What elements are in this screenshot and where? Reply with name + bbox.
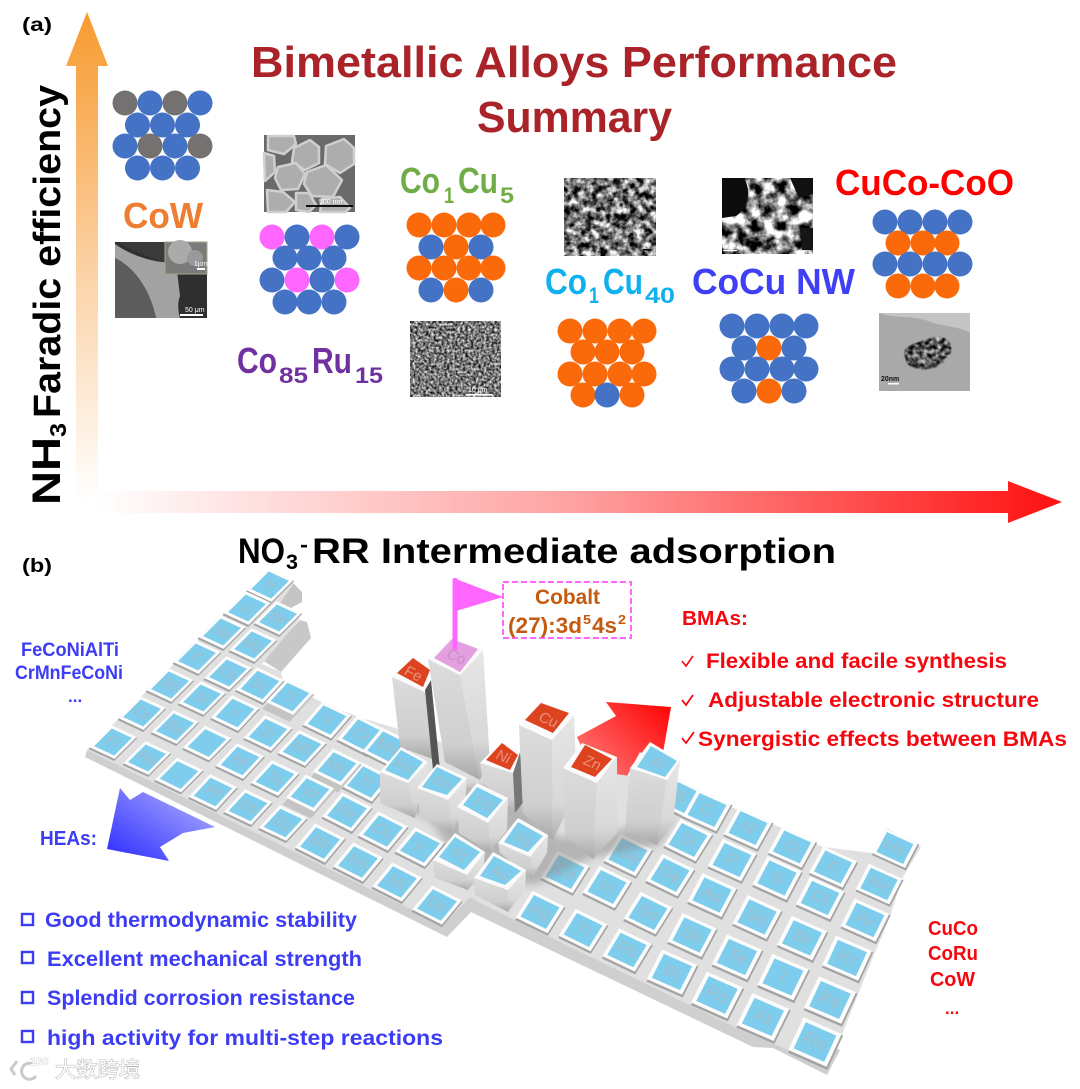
micrograph: Co1Cu5: 10 μm [468, 387, 488, 394]
periodic table tiles: Sc [247, 676, 273, 695]
callout: cobalt electron configuration [503, 582, 631, 638]
periodic table tiles: Hf [228, 752, 253, 771]
periodic table tiles: Ge [655, 863, 685, 887]
periodic table tiles: Ne [865, 873, 893, 895]
micrograph: Co1Cu5 [410, 321, 501, 397]
periodic table tiles: Y [225, 705, 245, 721]
periodic table tiles: S [768, 867, 787, 888]
label: high-entropy alloy examples [15, 640, 123, 706]
text block: BMAs advantages: BMAs: [682, 608, 748, 630]
periodic table tiles: B [671, 787, 690, 807]
periodic table tiles: Re [333, 801, 361, 823]
periodic table tiles: Xe [815, 987, 845, 1012]
periodic table tiles: Nb [288, 738, 316, 758]
callout: cobalt electron configuration: 4s [592, 613, 617, 638]
watermark: 大数跨境 [55, 1059, 140, 1082]
periodic table tiles: Ta [262, 769, 288, 788]
micrograph: CuCo-CoO TEM: 20nm [881, 376, 899, 383]
periodic table tiles: Br [790, 926, 815, 949]
label: bimetallic alloy examples: CuCo [928, 918, 978, 940]
label: Co85Ru15: 85 [279, 363, 308, 388]
arrow: vertical faradic efficiency axis [66, 12, 108, 502]
periodic table tiles: Ti [279, 689, 300, 706]
tower: Au [474, 852, 526, 912]
label: bimetallic alloy examples: CoW [930, 969, 975, 991]
watermark [11, 1056, 140, 1082]
atom lattice: Co85Ru15 [260, 224, 360, 314]
label: CuCo-CoO: CuCo-CoO [835, 162, 1014, 203]
atom lattice: CuCo-CoO [872, 210, 972, 298]
watermark: 100 [30, 1056, 48, 1068]
tower: Cu: Cu [535, 710, 561, 731]
periodic table tiles: Mt [384, 872, 411, 893]
text block: BMAs advantages [682, 608, 1067, 751]
text block: BMAs advantages: Flexible and facile synthesis [706, 650, 1007, 673]
periodic table tiles: Sg [269, 814, 296, 833]
atom lattice: Co1Cu5 [406, 212, 506, 302]
tower: Fe [392, 656, 435, 760]
tower: Pt [433, 833, 485, 890]
periodic table tiles: Tc [355, 772, 380, 792]
periodic table tiles: Hg [526, 900, 554, 924]
label: Co1Cu5 [400, 160, 514, 208]
periodic table tiles: Zr [256, 724, 280, 742]
periodic table tiles: Rn [800, 1027, 831, 1055]
tower: Cu [519, 701, 577, 840]
label: Co85Ru15: Ru [312, 340, 352, 381]
label: Co1Cu40 [545, 261, 675, 308]
periodic table tiles: Rf [201, 783, 226, 802]
micrograph: CoW [115, 240, 208, 318]
tower: Au: Au [488, 863, 512, 884]
periodic table tiles: Na [209, 622, 236, 641]
periodic table tiles: Ar [853, 908, 878, 931]
title: Summary [477, 93, 673, 142]
label: CoCu NW: CoCu NW [692, 261, 855, 302]
periodic table tiles: Os [369, 820, 397, 842]
label: Co1Cu40: Cu [603, 261, 643, 302]
callout: cobalt electron configuration: Cobalt [535, 586, 600, 609]
title: Bimetallic Alloys Performance [251, 38, 897, 87]
label: Co1Cu5: Co [400, 160, 440, 201]
title [251, 38, 897, 142]
periodic table tiles: As [699, 883, 726, 907]
periodic table tiles: Sr [191, 689, 215, 706]
periodic table tiles: Db [234, 797, 262, 817]
label: bimetallic alloy examples: CoRu [928, 943, 978, 965]
text block: HEAs advantages: high activity for multi-step reactions [47, 1027, 443, 1050]
arrow: HEA direction (blue) [107, 788, 215, 861]
periodic table tiles: Pb [613, 938, 641, 962]
tower: Ni [480, 740, 525, 813]
periodic table tiles: O [782, 838, 802, 857]
text block: HEAs advantages: Excellent mechanical strength [47, 948, 362, 971]
periodic table tiles: Cr [349, 725, 375, 745]
axis label: NO3-RR Intermediate adsorption: RR Intermediate adsorption [312, 532, 836, 571]
periodic table tiles: Rb [157, 675, 184, 694]
panel label (b): (b) [22, 556, 52, 577]
label: bimetallic alloy examples [928, 918, 978, 1018]
periodic table tiles: Sn [634, 901, 662, 925]
tower: Zn [563, 743, 617, 859]
tower: Rh: Rh [429, 773, 455, 794]
tower: Co (highlighted): Co [443, 647, 469, 668]
label: bimetallic alloy examples: ... [945, 999, 959, 1018]
label: Co85Ru15 [237, 340, 383, 388]
label: high-entropy alloy examples: CrMnFeCoNi [15, 663, 123, 684]
tower: Pd: Pd [471, 794, 495, 815]
axis label: NO3-RR Intermediate adsorption: NO [238, 532, 285, 571]
periodic table tiles: V [317, 712, 336, 729]
periodic table tiles: Ga [613, 843, 643, 867]
axis label: NH3 Faradic efficiency [25, 85, 71, 505]
periodic table tiles: Bh [306, 832, 334, 854]
periodic table tiles: Sb [678, 922, 706, 947]
periodic table tiles: H [260, 576, 281, 592]
periodic table tiles: K [188, 649, 208, 665]
periodic table tiles: Ca [215, 663, 242, 682]
periodic table tiles: Ra [134, 748, 161, 767]
periodic table tiles: Mg [239, 635, 268, 654]
periodic table tiles: Fr [102, 733, 125, 750]
text block: HEAs advantages: Good thermodynamic stability [45, 909, 357, 932]
periodic table tiles: He [881, 837, 908, 859]
tower: Rh [417, 764, 467, 833]
tower: Zn: Zn [580, 753, 604, 774]
text block: HEAs advantages: Splendid corrosion resistance [47, 987, 355, 1010]
periodic table tiles: Ds [423, 894, 451, 916]
tower: Fe: Fe [401, 663, 425, 685]
tower: Pd [457, 783, 508, 852]
axis label: NH3 Faradic efficiency: 3 [45, 423, 71, 437]
icon: pink flag on cobalt [452, 578, 503, 650]
label: CoW: CoW [123, 195, 203, 236]
label: Co85Ru15: 15 [355, 363, 383, 388]
label: Co1Cu40: Co [545, 261, 587, 302]
label: Co85Ru15: Co [237, 340, 277, 381]
tower: Ru [380, 747, 428, 818]
periodic table tiles: Kr [835, 945, 860, 969]
micrograph: Co85Ru15: 500 nm [319, 199, 343, 206]
label: Co1Cu5: 5 [500, 183, 514, 208]
micrograph: Co85Ru15 [264, 135, 355, 212]
axis label: NO3-RR Intermediate adsorption: 3 [286, 551, 298, 574]
periodic table tiles: Cl [809, 887, 831, 909]
periodic table tiles: Hs [344, 851, 372, 873]
periodic table tiles: Ir [410, 839, 429, 856]
tower: Ag: Ag [511, 829, 535, 850]
tower ground shadow [385, 785, 675, 885]
periodic table tiles: Te [724, 944, 750, 968]
micrograph: CoW: 50 μm [185, 307, 205, 314]
periodic table tiles: Po [703, 981, 732, 1007]
text block: HEAs advantages [22, 909, 443, 1050]
label: Co1Cu5: Cu [458, 160, 498, 201]
periodic table tiles: N [738, 818, 758, 838]
text block: BMAs advantages: Adjustable electronic structure [708, 689, 1039, 712]
label: high-entropy alloy examples: ... [68, 687, 82, 706]
text block: BMAs advantages: Synergistic effects between BMAs [698, 728, 1067, 751]
atom lattice: CoW [112, 90, 212, 180]
periodic table tiles: In [596, 877, 618, 897]
atom lattice: Co1Cu40 [558, 318, 656, 408]
axis label: NH3 Faradic efficiency: Faradic efficiency [27, 85, 69, 418]
periodic table tiles: At [751, 1005, 776, 1029]
periodic table tiles: Cd [551, 860, 579, 884]
periodic table tiles: Li [237, 599, 258, 616]
periodic table tiles: P [723, 850, 741, 869]
periodic table tiles: Bi [661, 960, 684, 983]
periodic table tiles: Se [743, 904, 771, 929]
arrow: BMA direction (red) [577, 702, 671, 795]
tower: Ag [498, 818, 548, 878]
label: HEAs: HEAs: [40, 828, 97, 850]
tower: Ni: Ni [493, 748, 513, 767]
micrograph: CuCo-CoO TEM [879, 313, 970, 391]
periodic table tiles: Ba [162, 717, 189, 736]
tower: Al: Al [647, 754, 667, 773]
arrow: horizontal intermediate adsorption axis [95, 481, 1062, 523]
label: Co1Cu40: 40 [645, 283, 675, 308]
tower: Al [625, 742, 680, 845]
callout: cobalt electron configuration: 2 [618, 612, 626, 627]
periodic table tiles: F [824, 858, 842, 876]
periodic table tiles: C [697, 800, 717, 820]
periodic table tiles: W [298, 784, 321, 802]
micrograph: CoCu NW [722, 178, 813, 254]
callout: cobalt electron configuration: (27):3d [508, 613, 582, 638]
periodic table tiles: I [777, 967, 790, 986]
label: Co1Cu5: 1 [444, 183, 454, 208]
panel label (a): (a) [22, 15, 52, 36]
periodic table tiles: Be [265, 608, 292, 627]
periodic table tiles: Mo [322, 757, 351, 778]
tower: Pt: Pt [449, 846, 469, 865]
label: Co1Cu40: 1 [589, 283, 599, 308]
tower: Co (highlighted) [425, 637, 490, 780]
periodic table tiles: Cs [129, 703, 156, 722]
tower: Ru: Ru [391, 756, 417, 777]
atom lattice: CoCu NW [720, 314, 818, 404]
periodic table tiles: Tl [572, 920, 594, 940]
micrograph: CoW: 1μm [194, 261, 208, 268]
axis label: NO3-RR Intermediate adsorption: - [300, 532, 308, 557]
label: high-entropy alloy examples: FeCoNiAlTi [21, 640, 119, 661]
callout: cobalt electron configuration: 5 [583, 612, 591, 627]
periodic table tiles: Mn [372, 736, 402, 758]
micrograph: Co1Cu40 [564, 178, 656, 256]
periodic table platform [85, 571, 921, 1075]
axis label: NH3 Faradic efficiency: NH [25, 437, 69, 505]
periodic table tiles [88, 568, 920, 1070]
periodic table tiles: Si [677, 829, 699, 850]
